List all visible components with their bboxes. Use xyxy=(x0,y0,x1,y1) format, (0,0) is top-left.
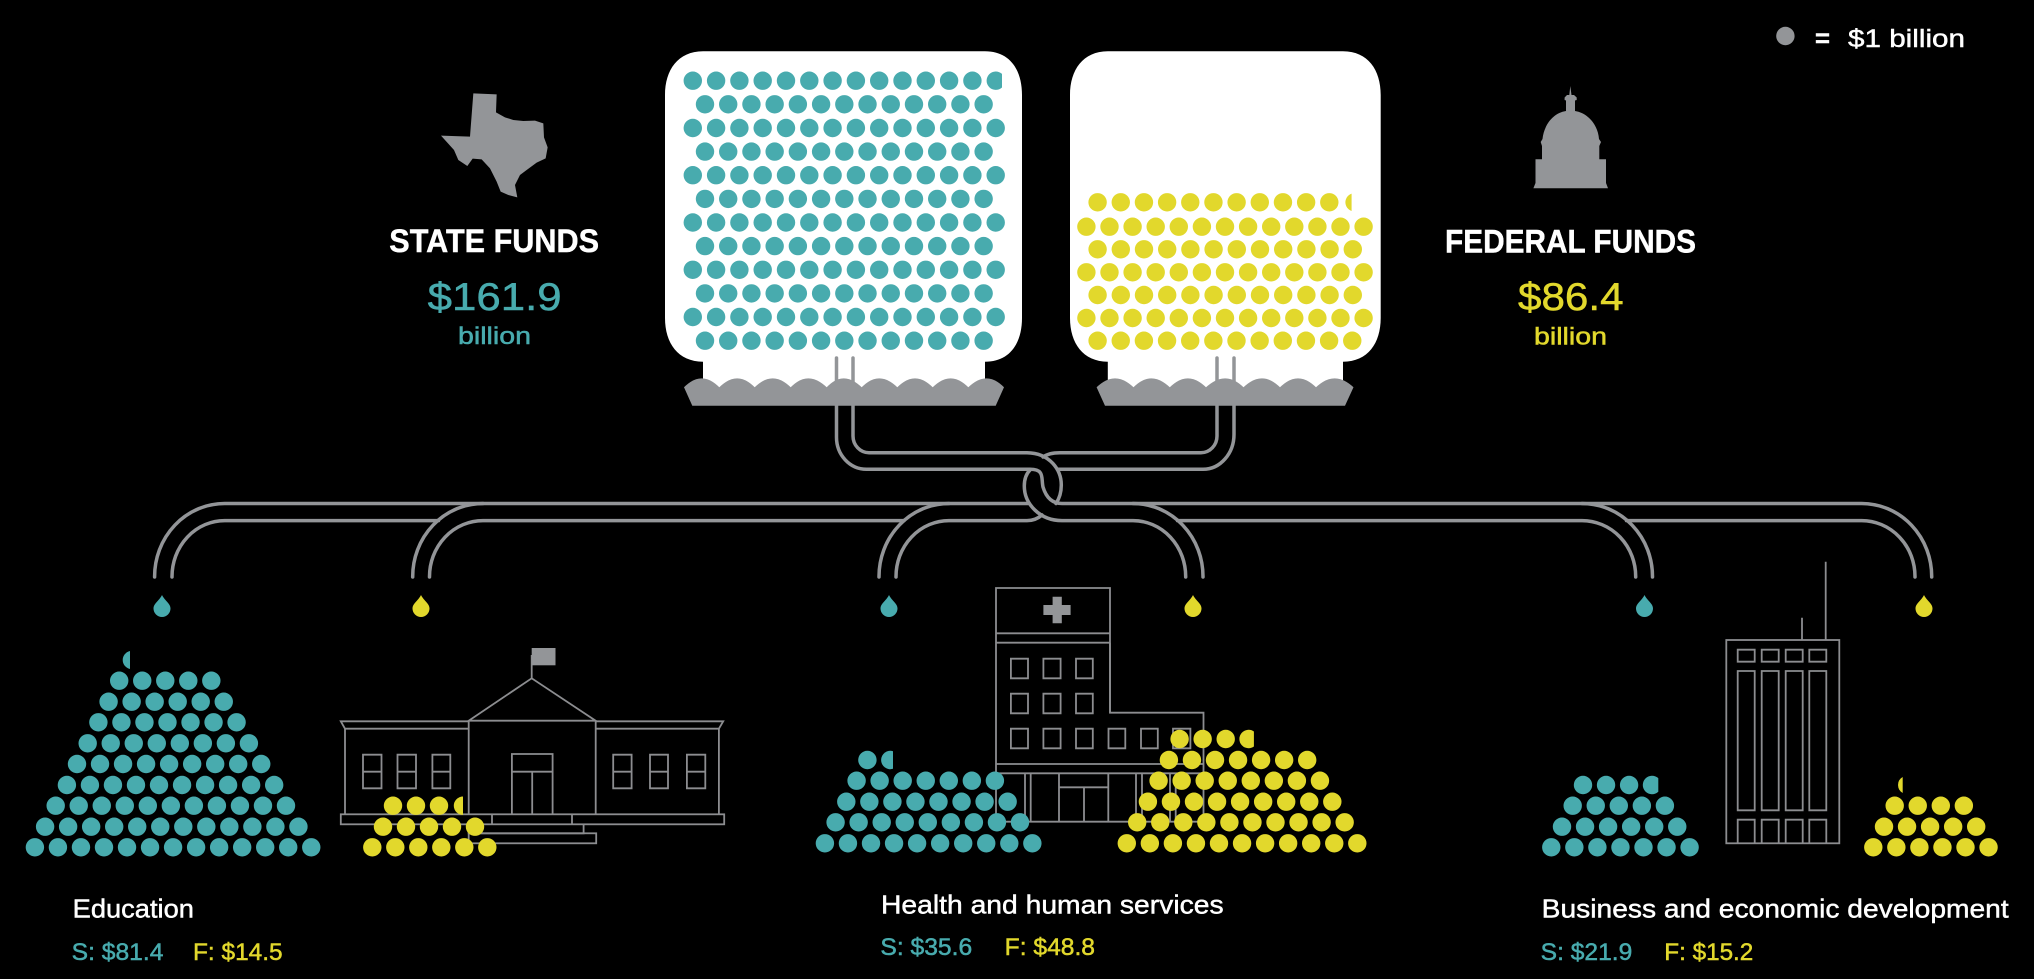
panel: federal funds tank xyxy=(1070,51,1381,406)
federal value: F: $14.5 xyxy=(193,939,283,966)
panel: business and economic development xyxy=(1541,562,2010,966)
icon: teal drop, business xyxy=(1636,595,1653,617)
category label: Business and economic development xyxy=(1542,893,2010,923)
icon: hospital building outline xyxy=(996,588,1204,822)
unit: billion: billion xyxy=(458,323,531,350)
yellow dot pile: federal $48.8 billion xyxy=(1127,730,1358,843)
panel: state funds tank xyxy=(665,51,1022,406)
yellow dot pile: federal $14.5 billion xyxy=(372,796,488,847)
legend: one dot equals $1 billion: = xyxy=(1815,25,1830,53)
state value: S: $21.9 xyxy=(1541,939,1632,966)
heading: federal funds: FEDERAL FUNDS xyxy=(1445,224,1696,260)
category label: Education xyxy=(73,893,194,923)
panel: education xyxy=(35,648,724,966)
panel: federal funds summary xyxy=(1445,86,1696,350)
teal dot pile: state $35.6 billion xyxy=(825,751,1032,843)
icon: yellow drop, education xyxy=(412,595,430,617)
tank body xyxy=(1070,51,1381,395)
state value: S: $35.6 xyxy=(880,934,972,961)
icon: office tower outline xyxy=(1726,562,1839,843)
legend: one dot equals $1 billion xyxy=(1776,25,1965,53)
unit: billion: billion xyxy=(1534,323,1607,350)
panel: health and human services xyxy=(825,588,1358,961)
icon: capitol dome xyxy=(1533,86,1608,188)
yellow dot pile: federal $15.2 billion xyxy=(1873,777,1989,847)
tank body xyxy=(665,51,1022,395)
teal dot pile: state $21.9 billion xyxy=(1551,776,1690,847)
tank scalloped base xyxy=(684,378,1004,406)
amount: state funds total: $161.9 xyxy=(428,276,562,319)
pipes from tanks through the knot to the six drips xyxy=(155,358,1932,577)
legend: one dot equals $1 billion: $1 billion xyxy=(1848,25,1965,53)
icon: Texas silhouette xyxy=(441,93,548,197)
state value: S: $81.4 xyxy=(72,939,163,966)
icon: teal drop, education xyxy=(154,595,170,617)
category label: Health and human services xyxy=(881,889,1224,919)
heading: state funds: STATE FUNDS xyxy=(389,223,599,259)
federal value: F: $15.2 xyxy=(1664,939,1753,966)
yellow dots: $86.4 billion xyxy=(1086,194,1364,341)
icon: school building outline xyxy=(341,648,724,843)
teal dots: $161.9 billion xyxy=(693,72,1002,341)
panel: state funds summary xyxy=(389,93,599,350)
icon: teal drop, health xyxy=(880,595,898,617)
amount: federal funds total: $86.4 xyxy=(1518,276,1624,319)
federal value: F: $48.8 xyxy=(1005,934,1095,961)
icon: yellow drop, health xyxy=(1184,595,1202,617)
tank scalloped base xyxy=(1097,378,1354,406)
icon: yellow drop, business xyxy=(1916,595,1932,617)
teal dot pile: state $81.4 billion xyxy=(35,651,311,847)
